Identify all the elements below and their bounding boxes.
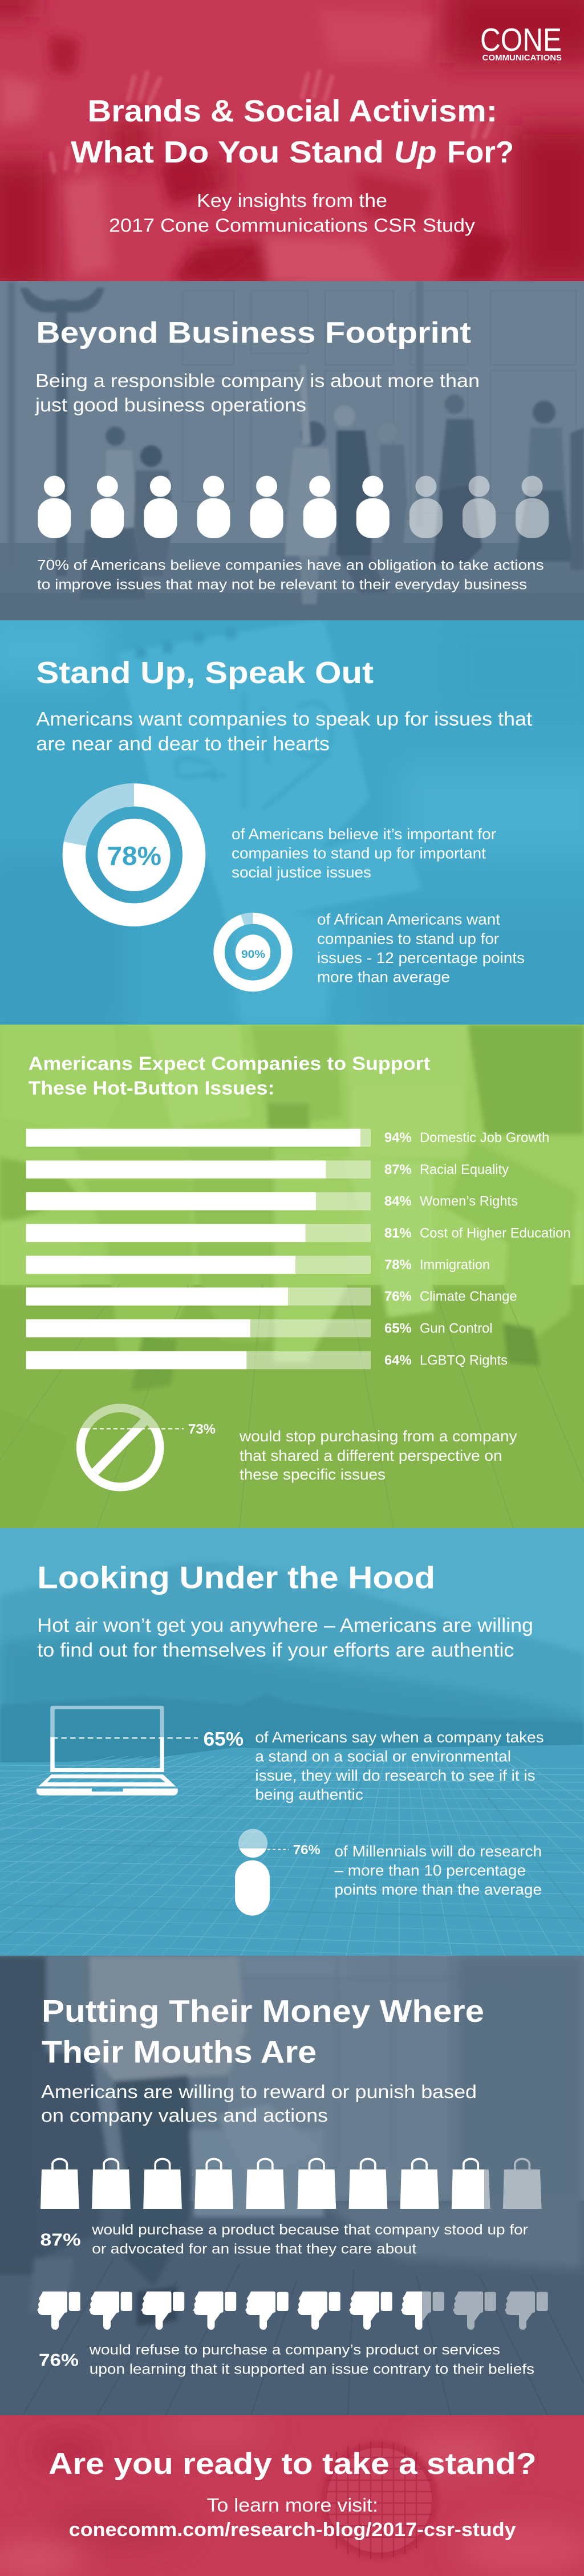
panel: call to action [0,2415,584,2576]
text: millennials stat: points more than the average [334,1881,542,1898]
text: 90% stat: companies to stand up for [317,931,499,948]
bar labels: 65% [384,1320,412,1336]
stat: 87%: 87% [40,2230,81,2250]
icon row: shopping bags 87% [40,2159,542,2209]
text: 76% stat: would refuse to purchase a company’s product or services [89,2342,500,2358]
intro text: Americans are willing to reward or punish based [41,2081,477,2102]
text: 90% stat: of African Americans want [317,911,501,928]
stat: 76% millennials: 76% [293,1842,321,1857]
bar chart [26,1129,571,1369]
text: stop purchasing [239,1428,517,1483]
intro text: just good business operations [35,395,306,416]
text: 87% stat: or advocated for an issue that they care about [92,2241,416,2257]
street photo background [0,281,584,620]
text: millennials stat [334,1843,542,1898]
text: stop purchasing: would stop purchasing from a company [239,1428,517,1445]
donut chart: 90%: 90% [241,949,265,961]
title: For? [447,135,514,169]
title [71,94,514,169]
intro text: are near and dear to their hearts [36,733,330,755]
icon: prohibited sign 73% [80,1408,184,1487]
title: What Do You Stand [71,135,384,169]
text: 90% stat: issues - 12 percentage points [317,949,525,966]
logo: CONE [480,22,562,58]
text: 65% stat [255,1729,544,1803]
text: 76% stat [89,2342,534,2378]
man in suit [334,405,355,427]
bar labels: Domestic Job Growth [420,1130,549,1145]
icon: laptop 65% [36,1706,198,1795]
text: 76% stat: upon learning that it supported an issue contrary to their beliefs [90,2362,534,2378]
bar labels: 64% [384,1352,412,1368]
text: 78% stat: of Americans believe it’s important for [232,826,496,843]
bar labels: 81% [384,1225,412,1241]
donut chart: 90% [219,913,287,986]
title: Up [394,135,437,169]
panel: looking under the hood [0,1528,584,1959]
bar labels: Immigration [420,1257,490,1273]
stat: 73%: 73% [188,1421,216,1437]
heading: These Hot-Button Issues: [29,1077,274,1098]
man in cap [533,401,555,424]
solar farm photo background [0,1528,584,1959]
text: 78% stat [232,826,496,881]
panel: header [0,0,584,296]
intro text: to find out for themselves if your efforts are authentic [37,1639,514,1661]
heading: Beyond Business Footprint [36,316,471,350]
shoppers photo background [0,1956,584,2415]
donut chart: 78%: 78% [107,841,161,871]
blonde woman [392,425,395,439]
intro text [35,370,480,416]
text: 90% stat [317,911,525,986]
text: millennials stat: of Millennials will do research [334,1843,542,1860]
bar labels: Gun Control [420,1320,493,1336]
heading [42,1993,484,2069]
stat text: 70% of Americans believe companies have an obligation to take actions [37,558,544,574]
url: conecomm.com/research-blog/2017-csr-study [69,2519,516,2541]
icon row: people 70% [38,476,549,538]
intro text: Being a responsible company is about more than [35,370,480,391]
protest sign photo background [0,616,584,1038]
heading: Americans Expect Companies to Support [29,1053,430,1074]
walking man [445,395,464,414]
intro text: Hot air won’t get you anywhere – Americans are willing [37,1615,533,1636]
subtitle: Key insights from the [197,190,387,211]
text: 90% stat: more than average [317,969,450,986]
heading: Their Mouths Are [42,2034,317,2069]
bar labels: Cost of Higher Education [420,1225,571,1241]
woman waving [301,421,326,446]
donut chart: 78% [64,783,194,915]
text: 65% stat: issue, they will do research to see if it is [255,1767,536,1784]
text: stop purchasing: these specific issues [240,1466,386,1483]
icon: person 76% [235,1829,289,1916]
stat text: to improve issues that may not be relevant to their everyday business [37,577,527,593]
stat: 65%: 65% [204,1728,244,1750]
subtitle: 2017 Cone Communications CSR Study [109,215,476,236]
intro text: on company values and actions [41,2105,328,2126]
bar labels: LGBTQ Rights [420,1352,508,1368]
title: Brands & Social Activism: [88,94,497,128]
bar labels: 87% [384,1162,412,1177]
heading: Stand Up, Speak Out [36,656,374,690]
seated people photo background [0,1025,584,1528]
panel: hot-button issues [0,1025,584,1528]
panel: stand up, speak out [0,616,584,1038]
bar labels: 78% [384,1257,412,1273]
icon row: thumbs down 76% [37,2291,548,2330]
heading: Putting Their Money Where [42,1993,484,2029]
text: 78% stat: companies to stand up for important [232,845,486,862]
text: 78% stat: social justice issues [232,864,371,881]
text: 87% stat [91,2222,528,2257]
text: stop purchasing: that shared a different perspective on [240,1447,502,1464]
text: 65% stat: of Americans say when a company takes [255,1729,544,1746]
text: 87% stat: would purchase a product because that company stood up for [91,2222,528,2238]
logo: COMMUNICATIONS [482,54,562,63]
heading [29,1053,430,1098]
header photo background [0,0,584,296]
text: 65% stat: being authentic [255,1786,363,1803]
text: millennials stat: – more than 10 percentage [334,1862,526,1879]
heading: Looking Under the Hood [37,1560,435,1595]
learn more text: To learn more visit: [206,2494,378,2516]
bar labels: 94% [384,1130,412,1145]
intro text [41,2081,477,2126]
bar labels: 76% [384,1289,412,1305]
microphone photo background [0,2415,584,2576]
panel: beyond business footprint [0,281,584,620]
bar labels: Racial Equality [420,1162,509,1177]
bar labels: Climate Change [420,1289,517,1305]
stat text [37,558,544,593]
intro text [36,709,533,755]
intro text [37,1615,533,1661]
left pedestrians [106,426,125,446]
stat: 76%: 76% [39,2350,79,2370]
bar labels [384,1130,571,1368]
bar labels: Women’s Rights [420,1194,518,1209]
intro text: Americans want companies to speak up for issues that [36,709,533,730]
bar labels: 84% [384,1194,412,1209]
panel: putting their money where their mouths are [0,1956,584,2415]
heading: Are you ready to take a stand? [48,2447,537,2481]
subtitle [109,190,476,236]
text: 65% stat: a stand on a social or environmental [255,1748,511,1765]
